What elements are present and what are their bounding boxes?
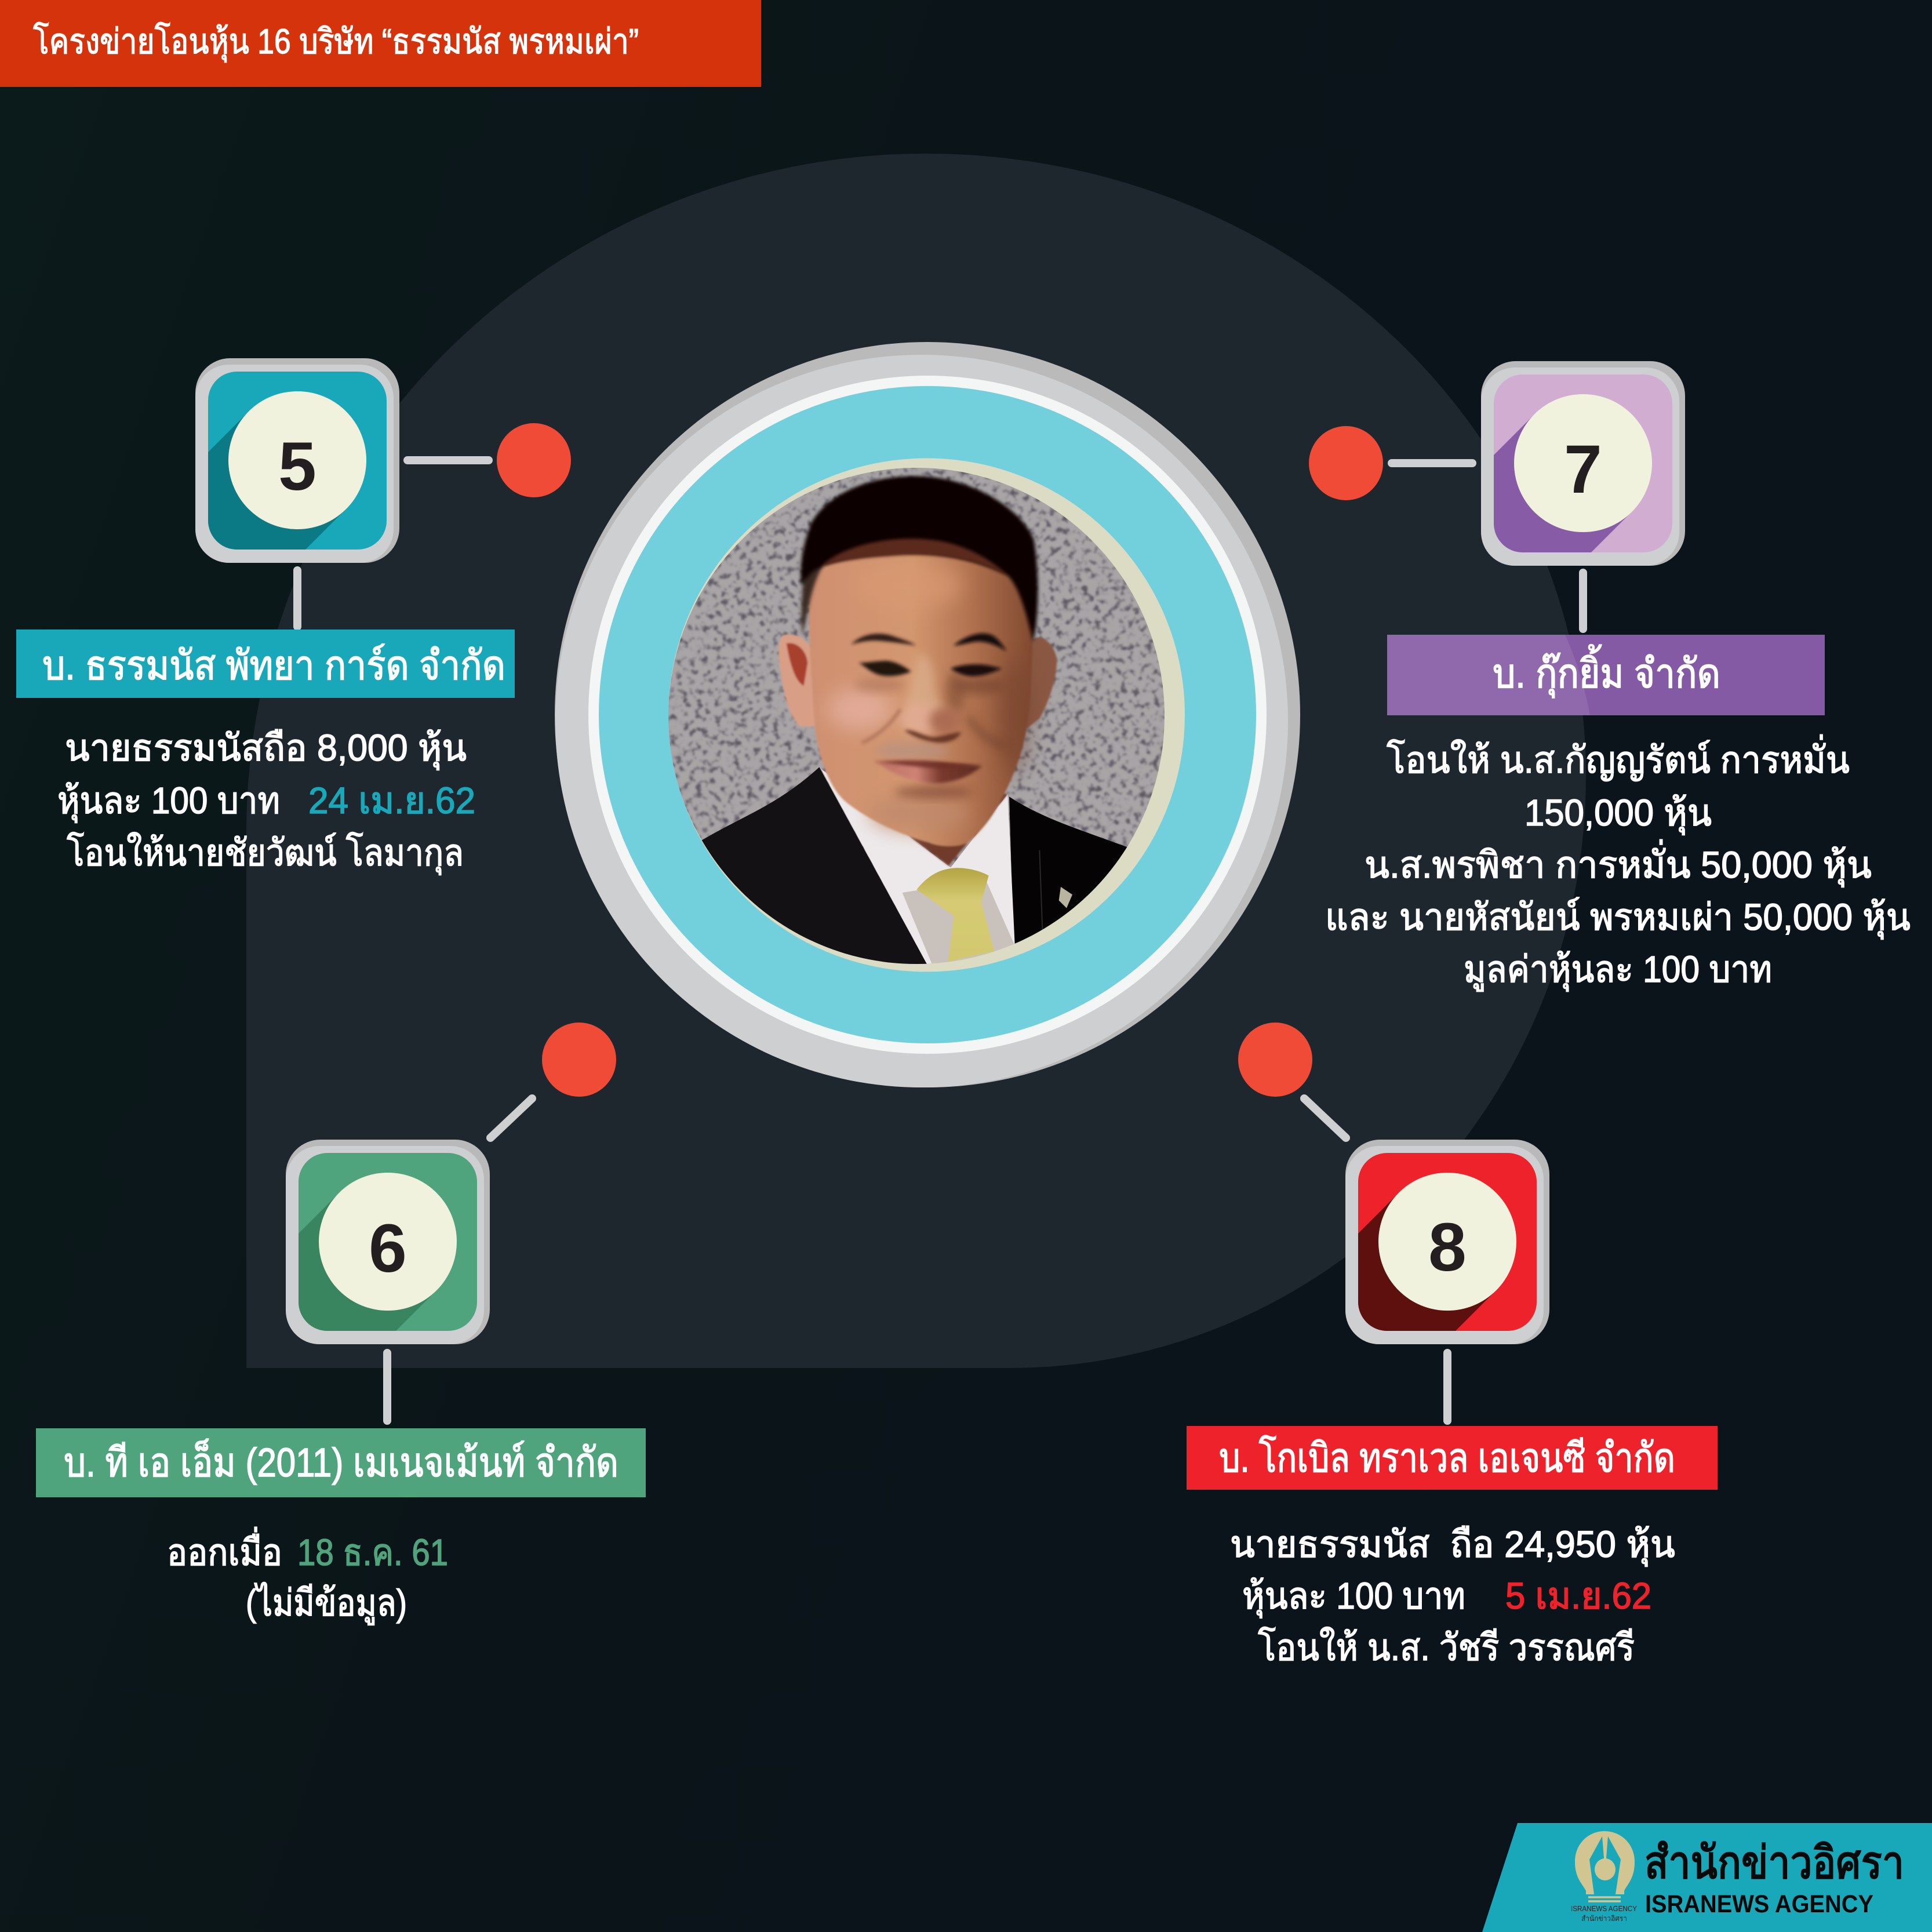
- red dot 6: [542, 1023, 616, 1097]
- details 7: และ นายหัสนัยน์ พรหมเผ่า 50,000 หุ้น: [1325, 896, 1911, 940]
- details 6: (ไม่มีข้อมูล): [246, 1582, 407, 1625]
- connector to dot 6: [387, 1098, 532, 1421]
- details 8: [1230, 1523, 1675, 1668]
- connector to dot 5: [297, 460, 489, 627]
- card 6: TEM (2011) Management: [36, 1023, 646, 1625]
- face: [809, 549, 1034, 846]
- icon: number 5 badge: 5: [278, 428, 316, 505]
- details 8: โอนให้ น.ส. วัชรี วรรณศรี: [1258, 1627, 1635, 1668]
- details 5: โอนให้นายชัยวัฒน์ โลมากุล: [67, 832, 464, 875]
- details 5: [57, 727, 475, 875]
- title bar: โครงข่ายโอนหุ้น 16 บริษัท “ธรรมนัส พรหมเผ่า”: [33, 21, 639, 63]
- lapel pin: [1059, 887, 1072, 908]
- details 7: น.ส.พรพิชา การหมั่น 50,000 หุ้น: [1365, 839, 1872, 887]
- hair: [801, 476, 1038, 642]
- details 7: โอนให้ น.ส.กัญญรัตน์ การหมั่น: [1387, 734, 1850, 781]
- facial shading: [827, 562, 1030, 831]
- left ear: [778, 635, 816, 726]
- details 6: 18 ธ.ค. 61: [297, 1531, 448, 1573]
- details 8: นายธรรมนัส ถือ 24,950 หุ้น: [1230, 1523, 1675, 1567]
- red dot 7: [1309, 426, 1383, 500]
- shirt: [821, 769, 1016, 976]
- label 8: [1187, 1426, 1718, 1490]
- details 6: [167, 1527, 448, 1625]
- label 5: [16, 630, 515, 698]
- icon: number 6 badge: 6: [369, 1210, 407, 1287]
- label 7: [1387, 635, 1825, 715]
- central portrait ring: [555, 342, 1300, 1087]
- details 5: นายธรรมนัสถือ 8,000 หุ้น: [65, 727, 467, 770]
- eyes: [859, 661, 911, 676]
- card 8: Noble Travel Agency: [1167, 1023, 1718, 1668]
- label 5: บ. ธรรมนัส พัทยา การ์ด จำกัด: [42, 643, 505, 688]
- details 7: 150,000 หุ้น: [1525, 792, 1712, 835]
- agency logo block: ISRANEWS AGENCY: [1645, 1890, 1873, 1918]
- card 7: Kukyim: [1302, 361, 1911, 992]
- portrait photo: [667, 467, 1166, 976]
- eye sockets: [854, 678, 904, 692]
- rounded backdrop shape: [246, 154, 1586, 1368]
- details 7: มูลค่าหุ้นละ 100 บาท: [1464, 948, 1772, 992]
- icon: number 6 badge: [107, 1140, 490, 1522]
- icon: number 7 badge: [1302, 361, 1685, 744]
- label 6: [36, 1428, 646, 1497]
- icon: number 7 badge: 7: [1564, 431, 1602, 508]
- mouth: [874, 760, 981, 784]
- icon: pen nib emblem: สำนักข่าวอิศรา: [1581, 1914, 1627, 1923]
- eyebrows: [851, 634, 916, 645]
- label 7: บ. กุ๊กยิ้ม จำกัด: [1493, 644, 1720, 698]
- cream disc behind portrait: [668, 458, 1185, 972]
- details 8: 5 เม.ย.62: [1505, 1575, 1651, 1617]
- neck: [827, 775, 1007, 865]
- details 7: [1325, 734, 1911, 992]
- icon: pen nib emblem: ISRANEWS AGENCY: [1571, 1904, 1637, 1913]
- nasolabial fold: [862, 709, 900, 743]
- nostrils and nose base: [904, 730, 961, 743]
- suit: [701, 767, 927, 964]
- details 5: หุ้นละ 100 บาท: [57, 780, 280, 823]
- red dot 5: [497, 423, 571, 497]
- details 6: ออกเมื่อ: [167, 1527, 282, 1573]
- details 8: หุ้นละ 100 บาท: [1242, 1575, 1465, 1618]
- icon: number 8 badge: [1167, 1140, 1549, 1522]
- details 5: 24 เม.ย.62: [308, 780, 475, 821]
- icon: pen nib emblem: [1571, 1831, 1637, 1923]
- tie: [916, 868, 994, 962]
- title bar: [0, 0, 761, 87]
- label 8: บ. โกเบิล ทราเวล เอเจนซี จำกัด: [1219, 1435, 1675, 1480]
- label 6: บ. ที เอ เอ็ม (2011) เมเนจเม้นท์ จำกัด: [64, 1439, 618, 1485]
- card 5: Thammanat Pattaya Card: [16, 358, 571, 875]
- connector to dot 8: [1304, 1098, 1447, 1421]
- right ear: [1024, 638, 1057, 730]
- connector to dot 7: [1392, 463, 1583, 629]
- red dot 8: [1238, 1023, 1312, 1097]
- icon: number 8 badge: 8: [1428, 1209, 1467, 1286]
- icon: number 5 badge: [17, 358, 399, 741]
- agency logo block: [1482, 1823, 1932, 1932]
